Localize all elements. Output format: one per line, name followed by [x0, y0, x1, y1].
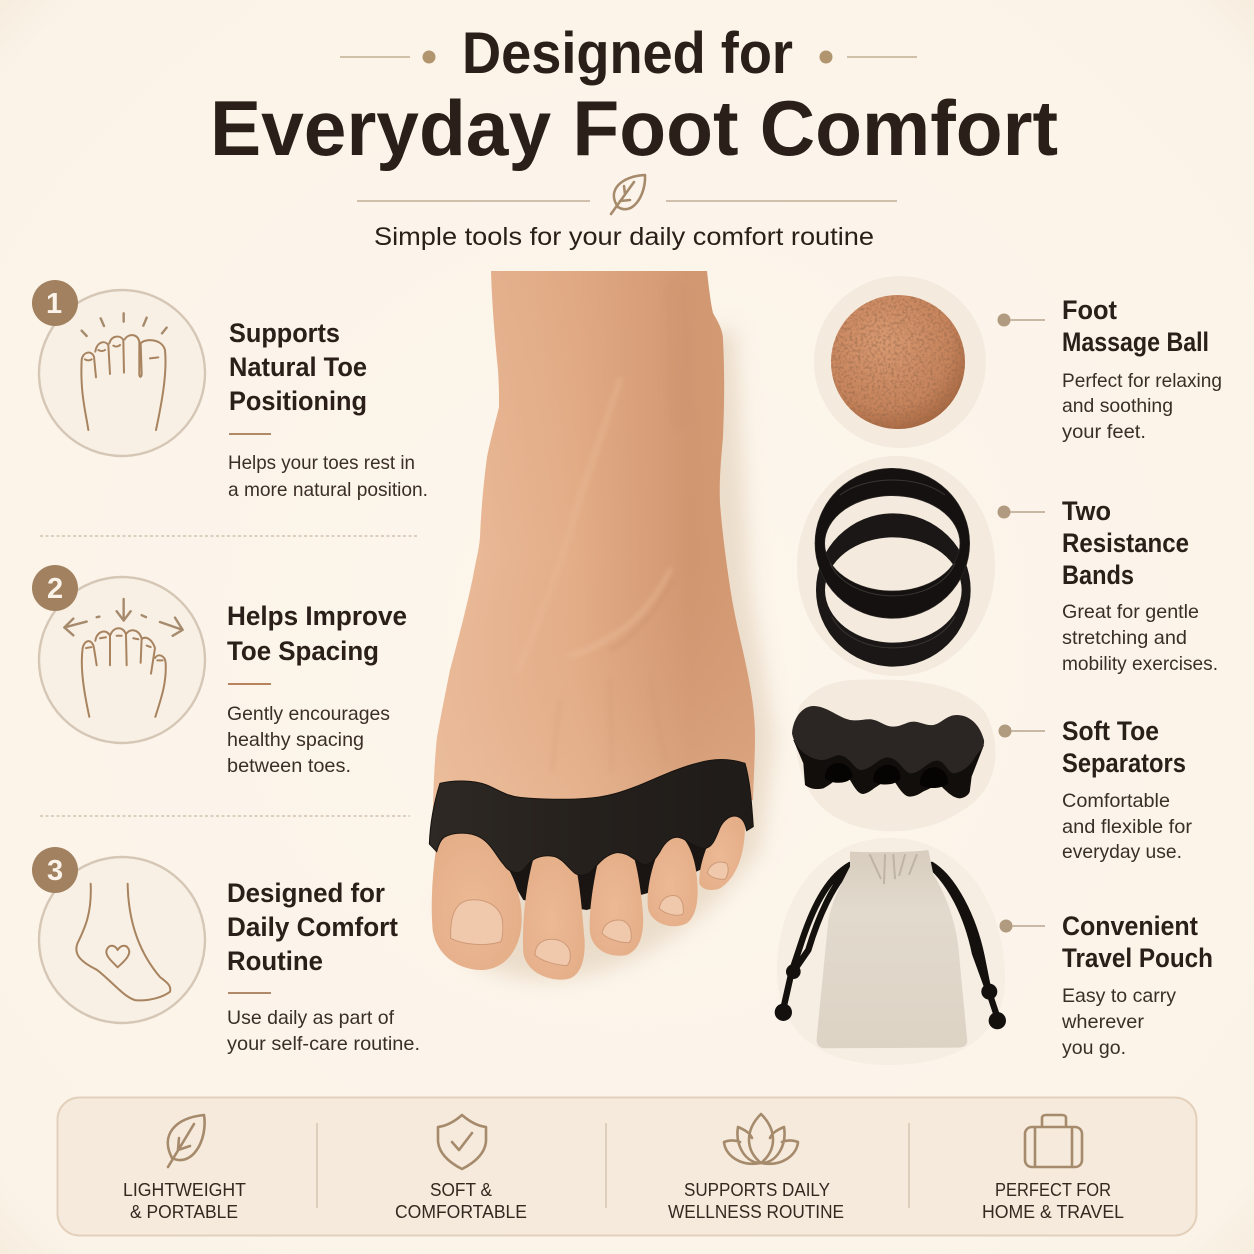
heading: Designed for	[227, 878, 385, 908]
product: massage ball	[814, 276, 1222, 448]
label	[668, 1180, 844, 1222]
label: LIGHTWEIGHT	[123, 1180, 246, 1200]
heading: Convenient	[1062, 911, 1198, 941]
body text: between toes.	[227, 755, 351, 777]
heading	[1062, 496, 1189, 590]
heading: Separators	[1062, 748, 1186, 778]
feature: soft	[395, 1115, 527, 1222]
heading: Two	[1062, 496, 1111, 526]
toe 2	[523, 853, 585, 980]
foot shading and veins	[518, 290, 680, 770]
connector	[998, 506, 1045, 518]
body text	[227, 1007, 420, 1055]
body text: a more natural position.	[228, 479, 428, 501]
header	[210, 21, 1058, 251]
subtitle: Simple tools for your daily comfort routine	[374, 223, 874, 251]
foot body	[432, 271, 755, 840]
bar background	[58, 1098, 1196, 1236]
feature: lightweight	[123, 1115, 246, 1222]
heading	[229, 318, 367, 416]
body text: Perfect for relaxing	[1062, 370, 1222, 392]
heading	[1062, 911, 1213, 973]
heading: Travel Pouch	[1062, 943, 1213, 973]
icon: shield with check	[438, 1115, 486, 1169]
label	[982, 1180, 1124, 1222]
benefit 1	[32, 280, 428, 501]
pouch halo	[777, 838, 1005, 1065]
body text: and flexible for	[1062, 816, 1193, 838]
body text: Easy to carry	[1062, 985, 1176, 1007]
body text: and soothing	[1062, 395, 1173, 417]
heading: Supports	[229, 318, 340, 348]
icon: foot with heart	[39, 857, 205, 1023]
heading: Positioning	[229, 386, 367, 416]
label: & PORTABLE	[130, 1202, 238, 1222]
icon: toes with natural position	[39, 290, 205, 456]
product: travel pouch	[775, 838, 1213, 1065]
leaf divider	[357, 175, 897, 214]
panel: included products	[775, 276, 1222, 1065]
panel: benefits	[32, 280, 428, 1055]
heading	[1062, 716, 1186, 778]
foot shadow	[440, 330, 775, 979]
label: HOME & TRAVEL	[982, 1202, 1124, 1222]
heading	[227, 878, 398, 976]
title line 2: Everyday Foot Comfort	[210, 84, 1058, 172]
icon: black separator	[792, 706, 984, 798]
product: resistance bands	[797, 456, 1218, 676]
heading: Helps Improve	[227, 601, 407, 631]
badge 3: 3	[47, 855, 63, 887]
feature: travel	[982, 1115, 1124, 1222]
icon: leaf	[168, 1115, 205, 1167]
body text	[228, 452, 428, 501]
foot with toe separator	[429, 271, 775, 980]
title line 1 with ornaments	[340, 21, 917, 86]
body text: Helps your toes rest in	[228, 452, 415, 474]
badge 1: 1	[46, 288, 62, 320]
icon: drawstring pouch	[775, 850, 1006, 1048]
heading: Toe Spacing	[227, 636, 379, 666]
body text	[227, 703, 390, 777]
heading	[1062, 295, 1209, 357]
body text	[1061, 985, 1176, 1059]
feature: wellness	[668, 1114, 844, 1222]
label: PERFECT FOR	[995, 1180, 1111, 1200]
heading: Resistance	[1062, 528, 1189, 558]
icon: two rings	[815, 468, 971, 667]
icon: cork ball	[831, 295, 965, 429]
body text	[1062, 601, 1218, 675]
bands halo	[797, 456, 995, 676]
title line 1 with ornaments: Designed for	[462, 21, 793, 86]
body text: Gently encourages	[227, 703, 390, 725]
heading: Soft Toe	[1062, 716, 1159, 746]
connector	[998, 724, 1045, 738]
body text: your feet.	[1062, 421, 1146, 443]
heading: Bands	[1062, 560, 1134, 590]
benefit 2	[32, 565, 407, 777]
badge 2: 2	[47, 573, 63, 605]
heading	[227, 601, 407, 666]
body text	[1062, 370, 1222, 443]
ball halo	[814, 276, 986, 448]
benefit 3	[32, 847, 420, 1055]
label: SUPPORTS DAILY	[684, 1180, 830, 1200]
heading: Natural Toe	[229, 352, 367, 382]
body text: Comfortable	[1062, 790, 1170, 812]
icon: suitcase	[1025, 1115, 1082, 1167]
toe separator band on foot	[429, 760, 753, 875]
badge 2	[32, 565, 78, 611]
product: toe separators	[792, 679, 1193, 863]
connector	[1000, 920, 1045, 932]
big toe	[432, 833, 522, 970]
toe 5	[699, 815, 745, 890]
badge 3	[32, 847, 78, 893]
toe 3	[590, 850, 643, 956]
icon: toes spreading	[39, 577, 205, 743]
body text	[1062, 790, 1193, 863]
heading: Routine	[227, 946, 323, 976]
panel: feature bar	[58, 1098, 1196, 1236]
badge 1	[32, 280, 78, 326]
body text: your self-care routine.	[227, 1033, 420, 1055]
body text: mobility exercises.	[1062, 653, 1218, 675]
label	[395, 1180, 527, 1222]
separators halo	[795, 679, 996, 831]
body text: you go.	[1062, 1037, 1126, 1059]
body text: Use daily as part of	[227, 1007, 395, 1029]
icon: lotus	[724, 1114, 798, 1164]
toe 4	[648, 835, 698, 926]
gaps behind toes	[500, 820, 740, 910]
body text: stretching and	[1062, 627, 1187, 649]
label	[123, 1180, 246, 1222]
label: COMFORTABLE	[395, 1202, 527, 1222]
label: SOFT &	[430, 1180, 492, 1200]
body text: wherever	[1061, 1011, 1145, 1033]
body text: everyday use.	[1062, 841, 1182, 863]
heading: Foot	[1062, 295, 1117, 325]
heading: Massage Ball	[1062, 327, 1209, 357]
body text: healthy spacing	[227, 729, 364, 751]
body text: Great for gentle	[1062, 601, 1199, 623]
connector	[998, 314, 1045, 326]
heading: Daily Comfort	[227, 912, 398, 942]
label: WELLNESS ROUTINE	[668, 1202, 844, 1222]
